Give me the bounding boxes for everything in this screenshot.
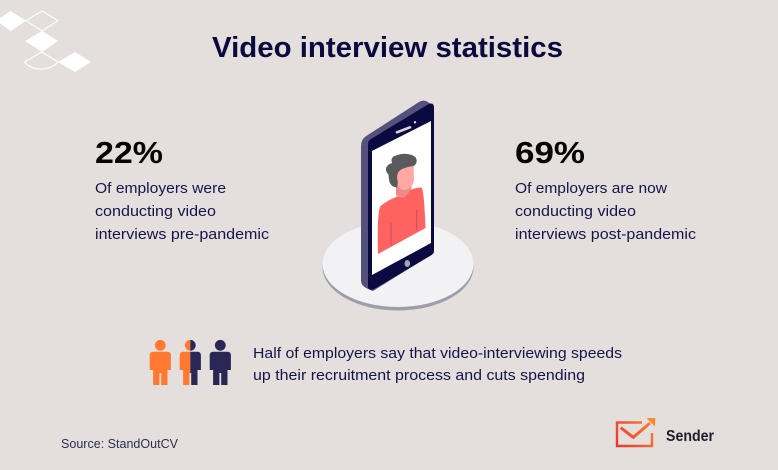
text: speeds up recruitment: Half of employers say that video-interviewing speeds xyxy=(253,345,622,362)
phone body xyxy=(361,101,434,291)
title: Video interview statistics xyxy=(212,32,563,64)
stat: 69% post-pandemic: 69% xyxy=(515,135,585,170)
text: speeds up recruitment xyxy=(253,345,622,384)
platform xyxy=(322,221,474,310)
person: half orange half navy xyxy=(180,340,201,385)
stat: 69% post-pandemic: interviews post-pandemic xyxy=(515,226,697,243)
stat: 22% pre-pandemic: interviews pre-pandemic xyxy=(95,226,270,243)
stat: 22% pre-pandemic: 22% xyxy=(95,135,163,170)
person: navy xyxy=(210,340,231,385)
illustration: phone on round platform xyxy=(322,101,474,310)
icon: envelope with arrow xyxy=(617,418,655,446)
stat: 69% post-pandemic: conducting video xyxy=(515,203,636,220)
stat: 22% pre-pandemic xyxy=(95,135,270,243)
text: speeds up recruitment: up their recruitment process and cuts spending xyxy=(253,367,585,384)
stat: 22% pre-pandemic: Of employers were xyxy=(95,180,226,197)
logo: Sender: Sender xyxy=(666,428,714,445)
person on screen xyxy=(378,154,426,254)
source: Source: StandOutCV xyxy=(61,437,179,451)
stat: 22% pre-pandemic: conducting video xyxy=(95,203,216,220)
stat: 69% post-pandemic xyxy=(515,135,697,243)
logo: Sender xyxy=(617,418,714,446)
stat: 69% post-pandemic: Of employers are now xyxy=(515,180,667,197)
person: orange xyxy=(150,340,171,385)
icon: people, half of employers xyxy=(150,340,231,385)
decorative diamond pattern xyxy=(0,11,91,72)
